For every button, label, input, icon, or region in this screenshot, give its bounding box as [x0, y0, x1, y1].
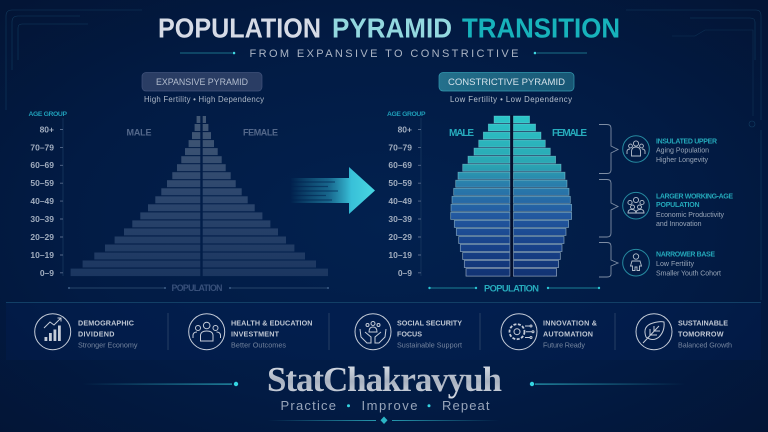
icon: working-age group	[623, 192, 649, 219]
age axis: left: 60–69	[30, 160, 54, 170]
callout: narrower base: NARROWER BASE	[656, 252, 715, 258]
callout: narrower base: Low Fertility	[656, 261, 694, 268]
badge: expansive pyramid	[142, 72, 264, 104]
subtitle: FROM EXPANSIVE TO CONSTRICTIVE	[250, 48, 518, 60]
icon: gear circuit	[501, 314, 537, 350]
item: innovation and automation	[501, 314, 597, 350]
age axis: left: 80+	[40, 124, 54, 134]
callout: larger working-age population: and Innovation	[656, 221, 702, 228]
badge: constrictive pyramid	[439, 72, 574, 104]
icon: leaf	[636, 314, 672, 350]
tagline: Practice	[280, 398, 336, 413]
item: sustainable tomorrow: TOMORROW	[678, 330, 724, 338]
panel: bottom strip	[6, 302, 761, 360]
icon: child	[623, 249, 649, 276]
item: social security focus	[355, 314, 462, 350]
icon: three people	[189, 314, 225, 350]
age axis: right: AGE GROUP	[387, 111, 426, 118]
item: innovation and automation: INNOVATION &	[543, 318, 597, 328]
frame: circuit corners	[6, 10, 761, 300]
badge: expansive pyramid: EXPANSIVE PYRAMID	[156, 77, 248, 88]
label: female (right): FEMALE	[552, 128, 587, 139]
callout: insulated upper: Aging Population	[656, 148, 709, 154]
age axis: left: 20–29	[30, 232, 54, 242]
age axis: right: 10–19	[388, 250, 412, 260]
item: demographic dividend	[35, 314, 138, 350]
title: TRANSITION	[462, 12, 620, 44]
age axis: right: 20–29	[388, 232, 412, 242]
badge: constrictive pyramid: CONSTRICTIVE PYRAMID	[448, 77, 565, 88]
age axis: right	[387, 111, 426, 278]
label: male (left): MALE	[126, 128, 152, 138]
icon: rising bars	[35, 314, 71, 350]
item: social security focus: FOCUS	[397, 330, 422, 338]
pyramid: expansive	[71, 116, 328, 276]
item: social security focus: SOCIAL SECURITY	[397, 318, 462, 328]
badge: constrictive pyramid: Low Fertility • Low Dependency	[450, 95, 572, 104]
icon: hands and people	[355, 314, 391, 350]
axis: population (right): POPULATION	[484, 283, 539, 293]
item: health and education investment: Better Outcomes	[231, 340, 286, 350]
age axis: right: 60–69	[388, 160, 412, 170]
arrow: transition	[290, 167, 375, 214]
age axis: left: 50–59	[30, 178, 54, 188]
item: sustainable tomorrow: Balanced Growth	[678, 340, 732, 350]
age axis: left: 70–79	[30, 142, 54, 152]
age axis: right: 70–79	[388, 142, 412, 152]
callout: larger working-age population	[599, 180, 733, 237]
age axis: left: 40–49	[30, 196, 54, 206]
footer lines	[82, 382, 686, 386]
brand name: StatChakravyuh	[267, 360, 502, 399]
badge: expansive pyramid: High Fertility • High Dependency	[144, 95, 264, 104]
item: sustainable tomorrow: SUSTAINABLE	[678, 318, 728, 328]
age axis: left: 0–9	[40, 268, 54, 278]
age axis: left	[28, 111, 67, 278]
pyramid: constrictive	[449, 115, 587, 277]
age axis: right: 40–49	[388, 196, 412, 206]
callout: insulated upper: INSULATED UPPER	[656, 138, 717, 145]
item: sustainable tomorrow	[636, 314, 732, 350]
title: PYRAMID	[332, 12, 452, 44]
item: demographic dividend: DIVIDEND	[78, 330, 114, 338]
callout: narrower base	[599, 242, 721, 277]
item: health and education investment	[189, 314, 312, 350]
tagline: Repeat	[442, 398, 490, 413]
age axis: right: 0–9	[398, 268, 412, 278]
label: male (right): MALE	[449, 128, 474, 139]
title: POPULATION	[158, 12, 321, 44]
callout: insulated upper: Higher Longevity	[656, 157, 708, 164]
item: demographic dividend: Stronger Economy	[78, 340, 138, 350]
title	[158, 12, 620, 44]
age axis: right: 50–59	[388, 178, 412, 188]
callout: insulated upper	[599, 124, 717, 174]
icon: aging population	[623, 136, 649, 162]
item: innovation and automation: AUTOMATION	[543, 330, 593, 338]
item: health and education investment: INVESTMENT	[231, 330, 280, 338]
item: social security focus: Sustainable Support	[397, 340, 462, 350]
age axis: right: 30–39	[388, 214, 412, 224]
axis: population (left): POPULATION	[172, 283, 222, 293]
callout: larger working-age population: POPULATION	[656, 202, 700, 209]
footer ornament	[267, 416, 500, 424]
item: innovation and automation: Future Ready	[543, 340, 585, 350]
callout: narrower base: Smaller Youth Cohort	[656, 270, 721, 277]
callout: larger working-age population: LARGER WORKING-AGE	[656, 194, 733, 200]
callout: larger working-age population: Economic Productivity	[656, 212, 724, 219]
age axis: left: 30–39	[30, 214, 54, 224]
label: female (left): FEMALE	[243, 128, 278, 138]
age axis: left: AGE GROUP	[28, 111, 67, 118]
tagline: Improve	[362, 398, 418, 413]
item: demographic dividend: DEMOGRAPHIC	[78, 318, 134, 328]
tagline	[280, 398, 490, 413]
age axis: right: 80+	[398, 124, 412, 134]
age axis: left: 10–19	[30, 250, 54, 260]
item: health and education investment: HEALTH & EDUCATION	[231, 318, 312, 328]
